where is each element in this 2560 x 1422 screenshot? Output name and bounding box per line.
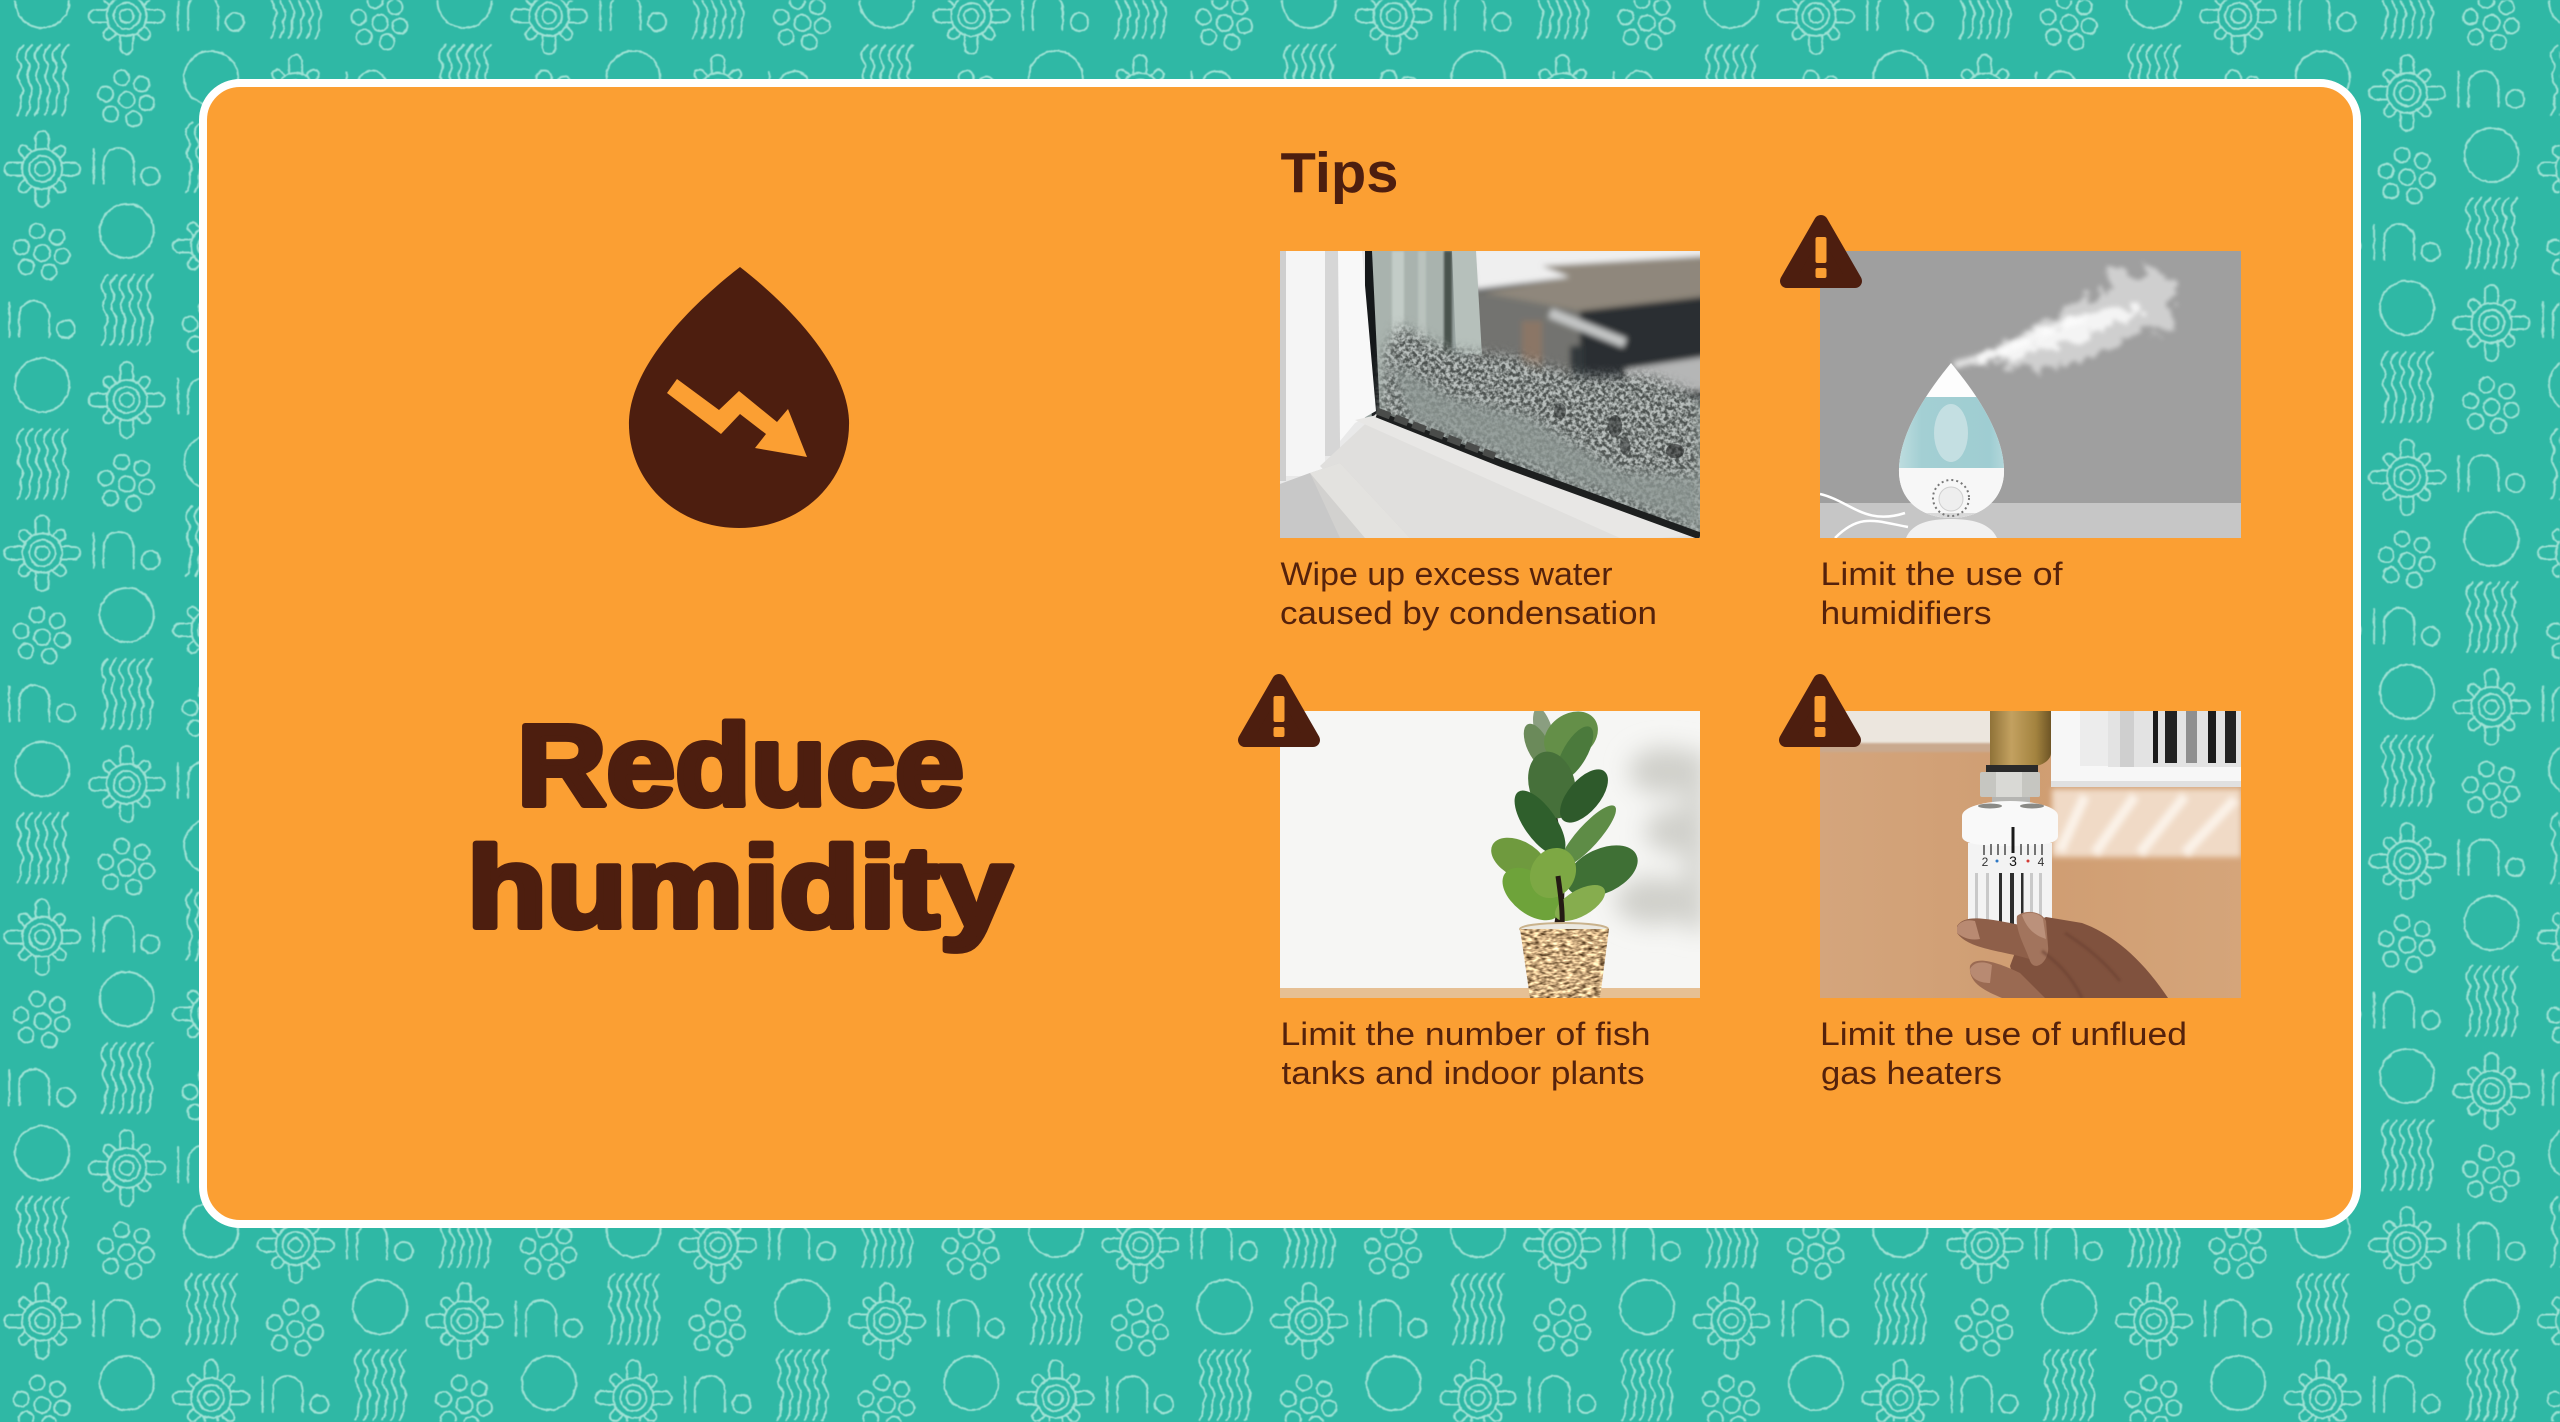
photo: humidifier <box>1820 251 2241 538</box>
heading: Tips: Tips <box>1280 141 1398 205</box>
caption: limit humidifiers <box>1820 556 2063 631</box>
caption: limit humidifiers: Limit the use of <box>1820 556 2063 592</box>
title: Reduce humidity <box>467 702 1012 952</box>
caption: limit unflued gas heaters: gas heaters <box>1821 1055 2002 1091</box>
caption: limit unflued gas heaters: Limit the use of unflued <box>1820 1016 2187 1052</box>
photo: window condensation <box>1280 251 1700 538</box>
caption: limit unflued gas heaters <box>1820 1016 2187 1091</box>
photo: radiator thermostat <box>1820 711 2241 998</box>
dial numbers <box>1982 853 2045 869</box>
photo: potted plant <box>1280 711 1700 998</box>
icon: water drop with downward arrow <box>629 267 849 528</box>
caption: wipe up excess water: caused by condensation <box>1280 595 1657 631</box>
caption: limit fish tanks and indoor plants: tanks and indoor plants <box>1282 1055 1644 1091</box>
title: Reduce humidity: humidity <box>467 824 1012 952</box>
caption: limit fish tanks and indoor plants <box>1280 1016 1650 1091</box>
dial numbers: 3 <box>2009 853 2017 869</box>
title: Reduce humidity: Reduce <box>517 702 964 830</box>
dial numbers: 4 <box>2038 855 2045 869</box>
caption: wipe up excess water <box>1280 556 1657 631</box>
dial numbers: 2 <box>1982 855 1989 869</box>
warning icon: fish tanks and plants <box>1245 681 1313 740</box>
caption: limit fish tanks and indoor plants: Limit the number of fish <box>1280 1016 1650 1052</box>
warning icon: gas heaters <box>1786 681 1854 740</box>
caption: limit humidifiers: humidifiers <box>1820 595 1992 631</box>
warning icon: humidifiers <box>1787 222 1855 281</box>
panel: orange card with white border <box>203 83 2357 1224</box>
caption: wipe up excess water: Wipe up excess water <box>1280 556 1613 592</box>
